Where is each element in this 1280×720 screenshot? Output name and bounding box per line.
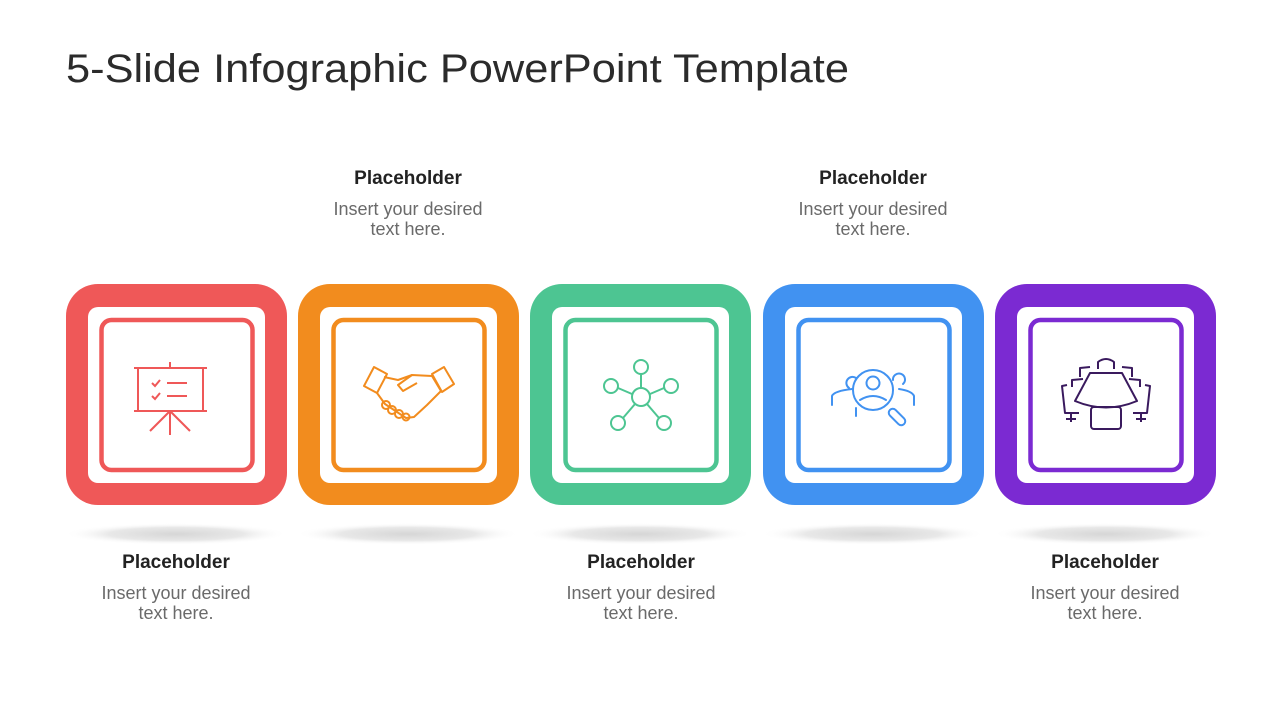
shadows [64,523,1217,545]
text block: 1: Placeholder [122,552,230,573]
icon: network [604,360,678,430]
text block: 2 [333,168,483,239]
text block: 1: text here. [138,603,214,623]
text block: 5: Insert your desired [1030,583,1180,603]
text block: 4: text here. [835,219,911,239]
text block: 2: Placeholder [354,168,462,189]
panel: purple [995,284,1216,505]
text block: 1 [101,552,251,623]
text block: 5 [1030,552,1180,623]
text block: 4: Insert your desired [798,199,948,219]
title: 5-Slide Infographic PowerPoint Template [66,47,849,91]
text block: 1: Insert your desired [101,583,251,603]
panel: red [66,284,287,505]
text block: 3: Insert your desired [566,583,716,603]
text block: 3: Placeholder [587,552,695,573]
text block: 5: Placeholder [1051,552,1159,573]
panel: blue [763,284,984,505]
text block: 5: text here. [1067,603,1143,623]
icon: handshake [364,367,454,420]
icon: conference table [1062,359,1150,429]
text block: 4 [798,168,948,239]
text block: 4: Placeholder [819,168,927,189]
text block: 2: Insert your desired [333,199,483,219]
text block: 2: text here. [370,219,446,239]
text block: 3 [566,552,716,623]
icon: people search [832,370,914,427]
text block: 3: text here. [603,603,679,623]
panel: green [530,284,751,505]
icon: presentation board [134,362,207,435]
panel: orange [298,284,519,505]
